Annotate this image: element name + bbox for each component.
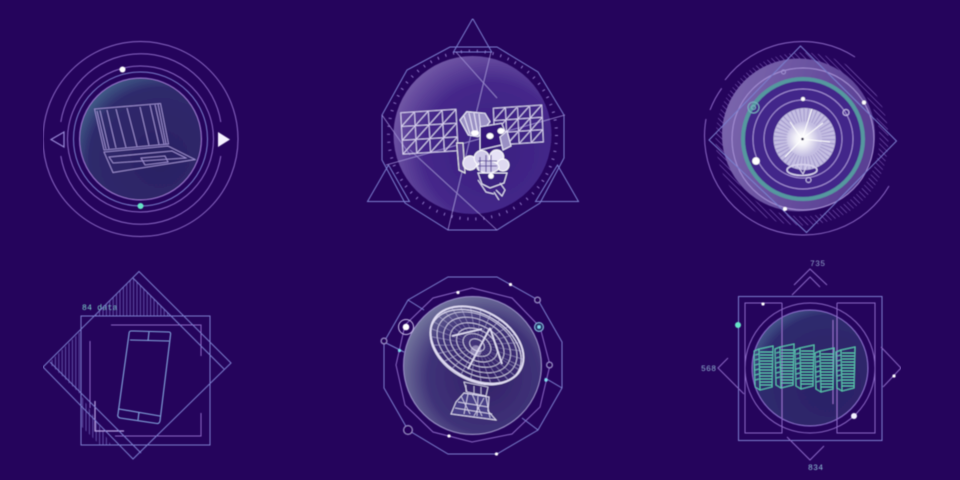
- sphere: [394, 56, 552, 214]
- small orbit nodes: [748, 70, 866, 211]
- number: 568: 568: [701, 365, 716, 374]
- chevron: left: [718, 358, 744, 394]
- icon: dish antenna: [416, 291, 537, 420]
- sphere: [752, 310, 868, 426]
- disc highlight: [722, 58, 875, 212]
- panel: parabolic dish orbit: [705, 41, 896, 235]
- connector lines: [384, 300, 562, 430]
- inner brackets: [90, 325, 201, 436]
- chevron: right: [881, 347, 901, 387]
- icon: laptop: [94, 104, 195, 172]
- satellite body: [457, 112, 511, 200]
- chevron: top: [792, 269, 827, 295]
- panel: phone: [43, 272, 231, 459]
- solar panel right: [493, 105, 543, 145]
- icon: left triangle: [51, 132, 64, 147]
- teal ring: [743, 79, 863, 199]
- hatched corners: [49, 278, 171, 445]
- nodes: [735, 302, 896, 419]
- icon: right triangle: [218, 132, 230, 147]
- square frame: [81, 316, 210, 445]
- triangles: [368, 18, 578, 202]
- icon: server racks: [754, 344, 855, 392]
- inner rings: [732, 68, 874, 210]
- orbit rings: [43, 42, 238, 236]
- sphere: [404, 296, 542, 434]
- crossing lines: [382, 52, 565, 230]
- nodes: [381, 283, 552, 456]
- number: 735: 735: [810, 260, 825, 269]
- solar panel left: [401, 109, 458, 154]
- tick ring: [388, 51, 556, 219]
- label: 84 data: 84 data: [82, 304, 118, 313]
- outer arcs: [705, 41, 889, 235]
- panel: radio telescope: [381, 277, 562, 456]
- dot: teal: [138, 203, 144, 209]
- panel: laptop: [43, 42, 238, 236]
- sphere: [80, 78, 202, 200]
- panel: servers: [701, 260, 901, 473]
- diamonds: [43, 272, 231, 459]
- outer ring: [745, 303, 875, 433]
- dish: [774, 108, 836, 176]
- panel: satellite: [368, 18, 578, 230]
- number: 834: 834: [808, 464, 823, 473]
- inner vertical lines: [832, 320, 834, 404]
- dot: white: [120, 66, 126, 72]
- dodecagon frame: [382, 47, 564, 230]
- square frame: [738, 296, 882, 440]
- hatched ring: [720, 57, 884, 221]
- inner disc: [743, 79, 863, 199]
- outer polygon: [384, 277, 562, 454]
- chevron: bottom: [787, 437, 824, 460]
- outer disc: [722, 58, 875, 212]
- inner polygon: [396, 288, 550, 442]
- icon: phone: [118, 331, 171, 424]
- diamond: [709, 46, 896, 232]
- inner columns: [745, 303, 875, 433]
